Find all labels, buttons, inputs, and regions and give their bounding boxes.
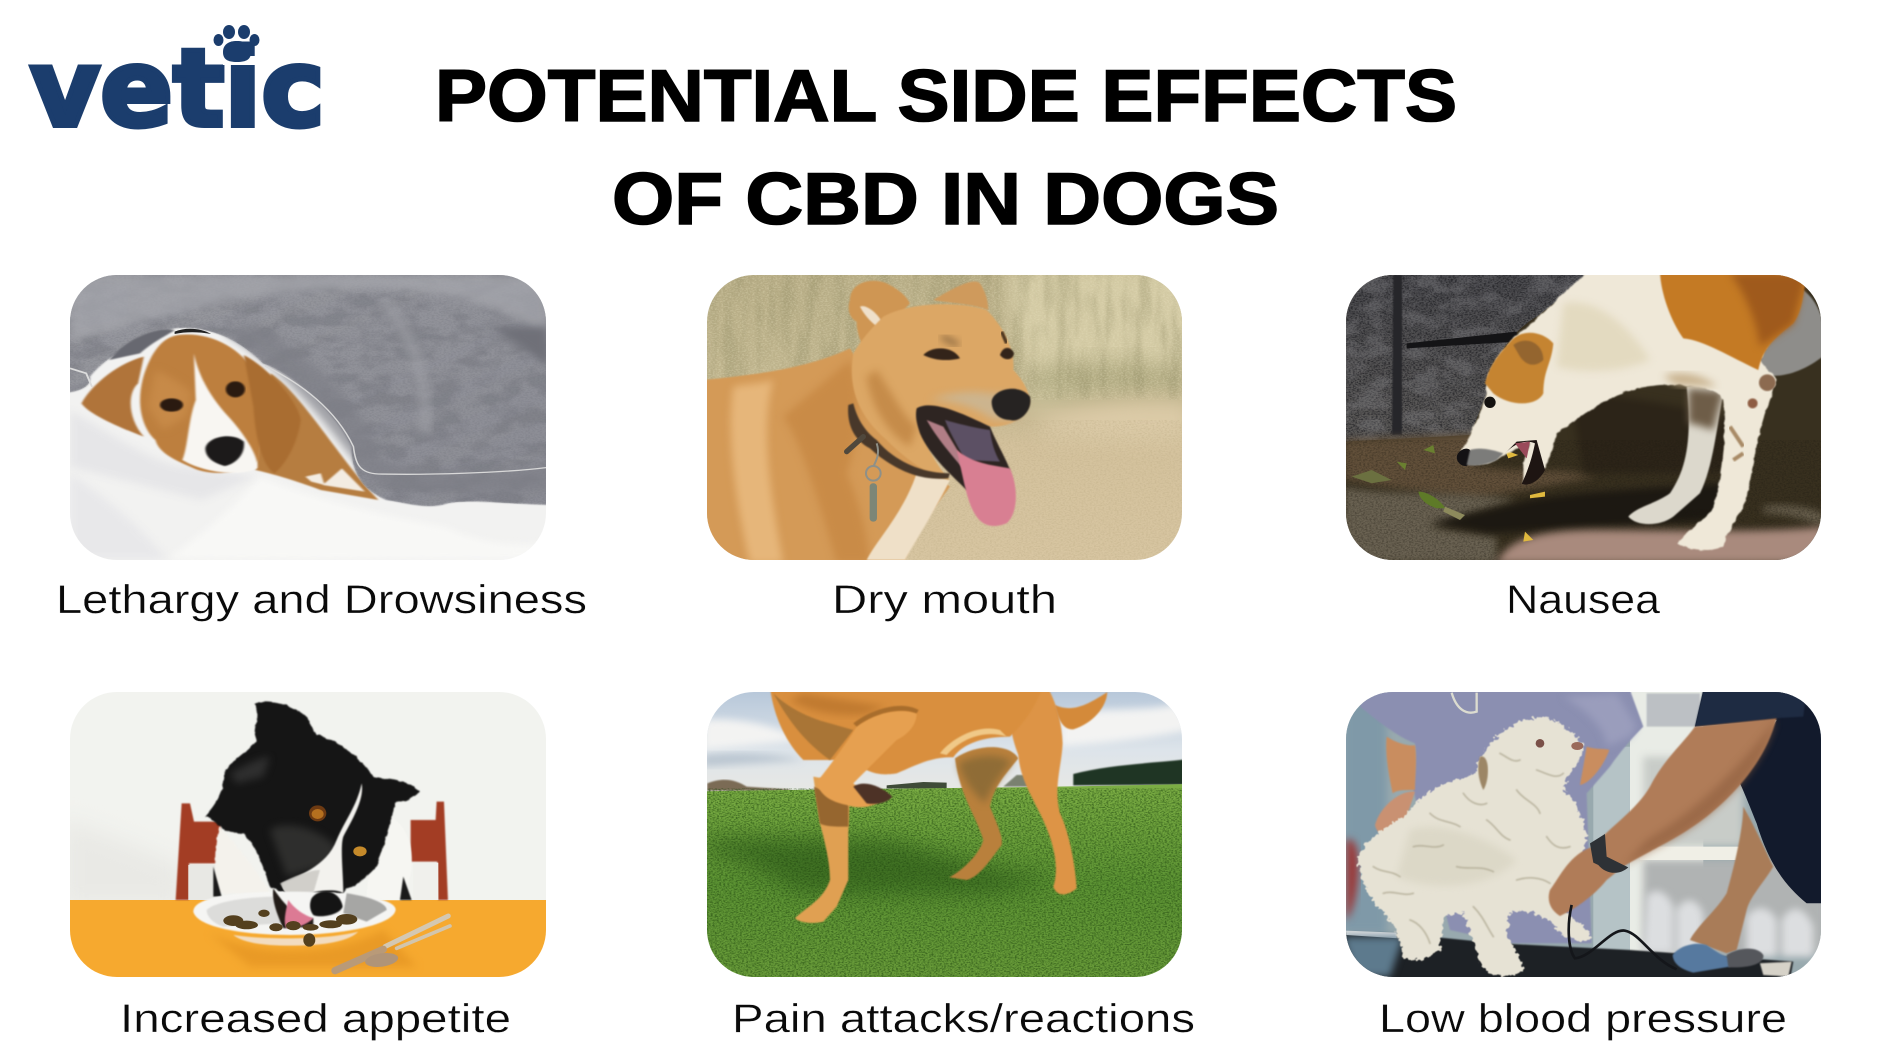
eyes <box>309 805 326 821</box>
white chest <box>867 473 950 560</box>
near hind leg <box>1007 687 1077 894</box>
blaze <box>182 353 257 473</box>
watch <box>1590 834 1628 873</box>
body white <box>1457 270 1807 550</box>
kibble <box>223 910 357 947</box>
bulb <box>1673 944 1730 973</box>
panel: lethargy and drowsiness <box>55 270 587 622</box>
horizon trees <box>707 780 790 791</box>
ear right <box>933 282 988 310</box>
nose <box>205 436 244 466</box>
chest <box>215 827 270 893</box>
raised leg <box>818 711 917 807</box>
ear left <box>82 357 144 437</box>
plate <box>193 892 396 935</box>
head <box>852 304 1030 480</box>
label: Increased appetite <box>120 997 511 1041</box>
panel: low blood pressure <box>1343 687 1827 1041</box>
chairs <box>176 803 221 900</box>
dog <box>1358 717 1592 976</box>
vet arm left <box>1386 737 1416 793</box>
logo: vetic: vetic <box>30 28 325 152</box>
shelf <box>1630 690 1703 967</box>
cutlery <box>335 916 450 971</box>
tail <box>1055 692 1107 729</box>
white stripe <box>282 783 362 897</box>
front leg standing <box>795 777 850 923</box>
icon: paw <box>214 25 260 62</box>
pink band <box>1497 527 1823 563</box>
label: Lethargy and Drowsiness <box>56 578 587 622</box>
table <box>1343 932 1793 980</box>
photo: dog lifting paw on grass <box>703 687 1190 985</box>
left background <box>1343 690 1387 933</box>
eyes <box>923 348 960 360</box>
collar <box>848 403 950 479</box>
main arm <box>1549 718 1777 916</box>
ground <box>1343 433 1597 500</box>
stethoscope <box>1452 693 1477 713</box>
blanket trim <box>265 366 548 474</box>
photo: dog retching on pavement <box>1343 270 1827 563</box>
nose <box>992 389 1030 421</box>
photo: panting tan dog <box>703 264 1203 563</box>
tag <box>866 443 881 481</box>
leaves <box>1418 492 1445 508</box>
muzzle & tongue <box>273 888 313 928</box>
body <box>770 687 1043 774</box>
label: Nausea <box>1506 578 1661 622</box>
scrubs <box>1360 690 1643 943</box>
table <box>67 900 550 980</box>
mouth <box>1505 440 1545 485</box>
label: Low blood pressure <box>1379 997 1787 1041</box>
tail / grey haunch <box>1760 290 1821 376</box>
ear left <box>848 280 910 342</box>
body <box>255 373 378 500</box>
title: OF CBD IN DOGS <box>612 159 1279 240</box>
title <box>435 56 1457 240</box>
panel: nausea <box>1343 270 1827 622</box>
tube <box>1569 905 1677 969</box>
head orange + ear <box>1485 333 1553 403</box>
body <box>703 348 950 563</box>
panel: dry mouth <box>703 264 1203 622</box>
knee mark <box>1759 374 1776 391</box>
far hind leg <box>949 747 1018 880</box>
second arm <box>1690 807 1773 953</box>
mouth <box>916 405 1010 490</box>
head black <box>205 702 420 894</box>
tongue top <box>945 420 1000 462</box>
far hind leg <box>1628 385 1723 524</box>
blanket <box>55 270 555 506</box>
title: POTENTIAL SIDE EFFECTS <box>435 56 1457 137</box>
tongue <box>957 450 1016 526</box>
grass <box>703 784 1187 983</box>
wall <box>1343 270 1597 442</box>
dark vet <box>1695 690 1827 903</box>
photo: vet checking small white dog <box>1343 687 1827 980</box>
ear right <box>244 355 301 473</box>
photo: beagle under a grey blanket <box>70 275 546 560</box>
photo: border collie eating at table <box>63 687 553 980</box>
panel: increased appetite <box>63 687 553 1041</box>
head <box>140 335 262 473</box>
label: Dry mouth <box>832 578 1057 622</box>
paw pads <box>853 784 892 804</box>
panel: pain attacks/reactions <box>703 687 1195 1041</box>
orange patch <box>1660 270 1807 370</box>
label: Pain attacks/reactions <box>732 997 1195 1041</box>
eyes <box>160 398 183 412</box>
